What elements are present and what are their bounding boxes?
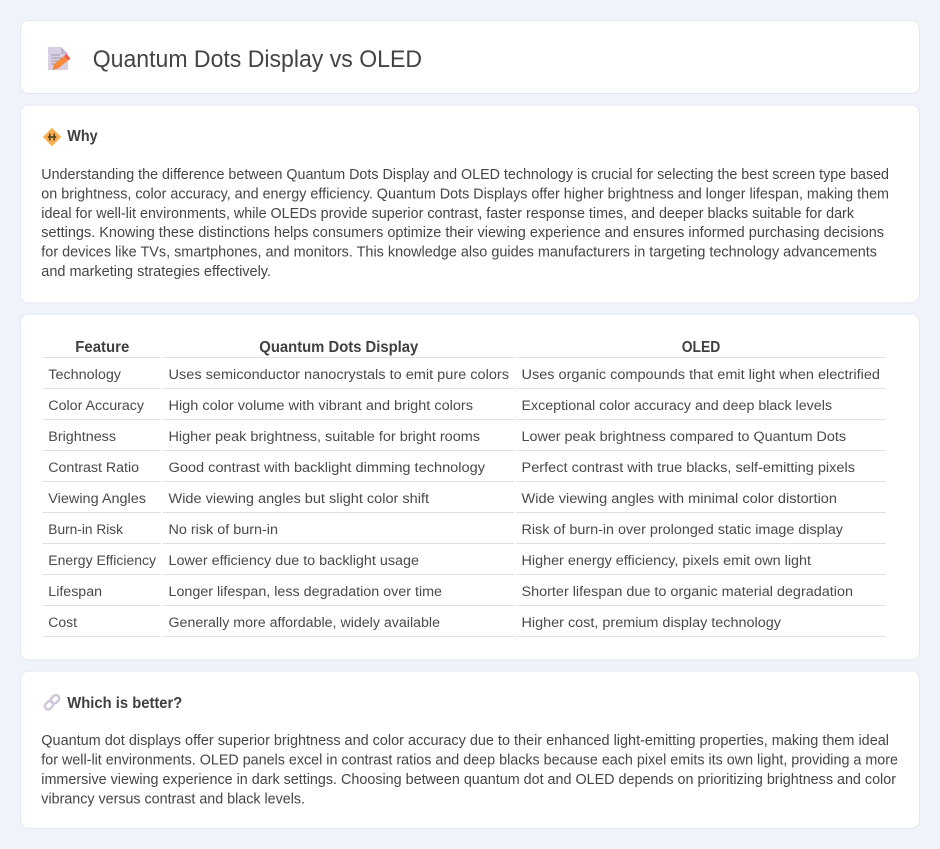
row: viewing angles <box>48 491 837 507</box>
row: cost: Higher cost, premium display technology <box>522 615 782 631</box>
row: viewing angles: Viewing Angles <box>48 491 146 507</box>
row: contrast ratio: Good contrast with backlight dimming technology <box>168 460 486 476</box>
row: burn-in risk: No risk of burn-in <box>168 522 278 538</box>
text block: which is better paragraph <box>41 733 898 807</box>
text block: why paragraph: ideal for well-lit environments, while OLEDs provide superior contrast, faster response times, and deeper blacks suitable for dark <box>41 206 855 222</box>
panel: which is better <box>20 671 920 828</box>
row: technology: Uses organic compounds that emit light when electrified <box>522 367 880 383</box>
table header row: OLED <box>682 339 720 356</box>
row: technology: Uses semiconductor nanocrystals to emit pure colors <box>168 367 509 383</box>
row: technology: Technology <box>48 367 122 383</box>
panel: header <box>20 20 920 94</box>
row: burn-in risk: Risk of burn-in over prolonged static image display <box>522 522 844 538</box>
row: brightness <box>48 429 846 445</box>
row: color accuracy: High color volume with vibrant and bright colors <box>168 398 473 414</box>
row: color accuracy: Exceptional color accuracy and deep black levels <box>522 398 832 414</box>
row: brightness: Lower peak brightness compared to Quantum Dots <box>522 429 846 445</box>
row: color accuracy: Color Accuracy <box>48 398 145 414</box>
text block: why paragraph: for devices like TVs, smartphones, and monitors. This knowledge also guides manufacturers in targeting technology advancements <box>41 245 877 261</box>
table header row: Quantum Dots Display <box>259 339 418 356</box>
panel: why <box>20 105 920 303</box>
row: color accuracy <box>48 398 832 414</box>
panel: comparison table <box>20 314 920 660</box>
row: burn-in risk <box>48 522 844 538</box>
icon: chain link <box>44 694 60 711</box>
table header row: Feature <box>75 339 129 356</box>
row: brightness: Higher peak brightness, suitable for bright rooms <box>168 429 480 445</box>
row: lifespan <box>48 584 853 600</box>
row: lifespan: Shorter lifespan due to organic material degradation <box>522 584 853 600</box>
title: Quantum Dots Display vs OLED <box>93 46 422 73</box>
row: contrast ratio: Perfect contrast with true blacks, self-emitting pixels <box>522 460 855 476</box>
row: energy efficiency: Lower efficiency due to backlight usage <box>168 553 419 569</box>
row: technology <box>48 367 880 383</box>
text block: which is better paragraph: vibrancy versus contrast and black levels. <box>41 791 305 807</box>
row: brightness: Brightness <box>48 429 116 445</box>
text block: why paragraph: Understanding the difference between Quantum Dots Display and OLED technology is crucial for selecting the best screen type based <box>41 167 889 183</box>
row: cost: Generally more affordable, widely available <box>168 615 440 631</box>
row: viewing angles: Wide viewing angles but slight color shift <box>168 491 429 507</box>
text block: which is better paragraph: immersive viewing experience in dark settings. Choosing between quantum dot and OLED depends on prioritizing brightness and color <box>41 772 896 788</box>
table header row <box>75 339 720 356</box>
icon: document with pencil <box>48 47 70 70</box>
row: burn-in risk: Burn-in Risk <box>48 522 124 538</box>
text block: why paragraph: on brightness, color accuracy, and energy efficiency. Quantum Dots Displays offer higher brightness and longer lifespan, making them <box>41 186 889 202</box>
text block: which is better paragraph: for well-lit environments. OLED panels excel in contrast ratios and deep blacks because each pixel emits its own light, providing a more <box>41 752 898 768</box>
row: cost <box>48 615 782 631</box>
row: viewing angles: Wide viewing angles with minimal color distortion <box>522 491 837 507</box>
row: lifespan: Longer lifespan, less degradation over time <box>168 584 442 600</box>
row: lifespan: Lifespan <box>48 584 102 600</box>
row: contrast ratio <box>48 460 855 476</box>
text block: which is better paragraph: Quantum dot displays offer superior brightness and color accuracy due to their enhanced light-emitting properties, making them ideal <box>41 733 889 749</box>
heading: why: Why <box>67 128 98 145</box>
row: contrast ratio: Contrast Ratio <box>48 460 139 476</box>
icon: warning diamond <box>44 128 60 146</box>
text block: why paragraph: settings. Knowing these distinctions helps consumers optimize their viewing experience and ensures informed purchasing decisions <box>41 225 884 241</box>
row: energy efficiency: Higher energy efficiency, pixels emit own light <box>522 553 811 569</box>
row: cost: Cost <box>48 615 77 631</box>
text block: why paragraph <box>41 167 889 280</box>
text block: why paragraph: and marketing strategies effectively. <box>41 264 271 280</box>
row: energy efficiency <box>48 553 811 569</box>
heading: which is better: Which is better? <box>67 695 182 712</box>
row: energy efficiency: Energy Efficiency <box>48 553 157 569</box>
